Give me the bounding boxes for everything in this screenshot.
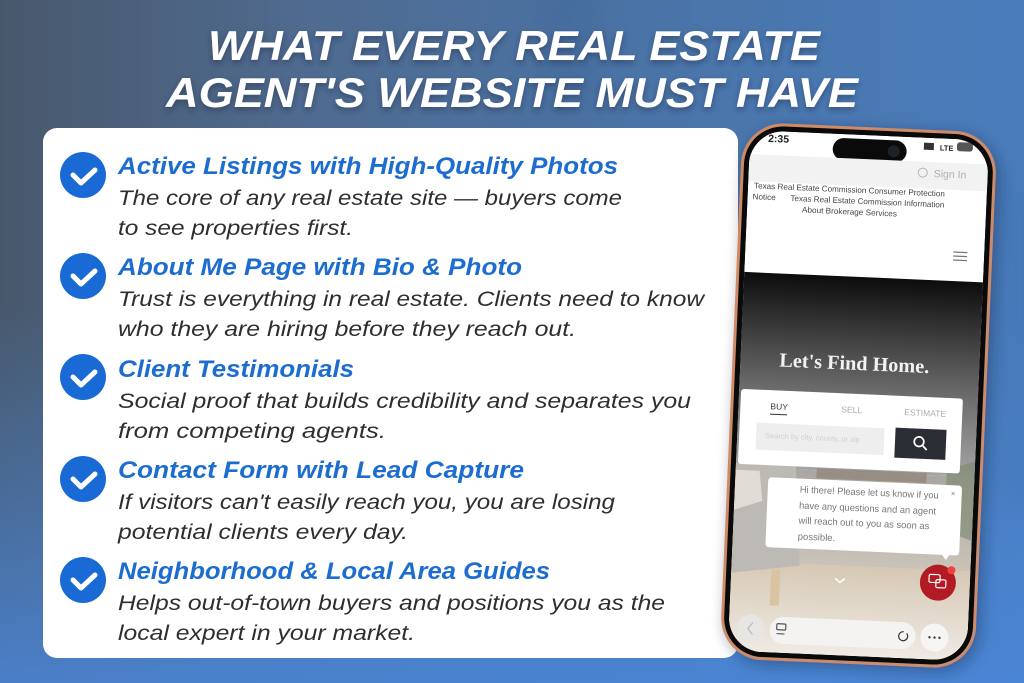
notice links: About Brokerage Services: [802, 205, 897, 219]
chat bubble: have any questions and an agent: [799, 501, 937, 518]
item: active listings: The core of any real estate site — buyers come: [118, 187, 622, 210]
item: neighborhood guides: local expert in your market.: [118, 622, 415, 645]
notice links: Notice: [752, 192, 776, 202]
item: contact form: [60, 456, 615, 544]
chat bubble: ×: [951, 489, 956, 498]
item: active listings: to see properties first.: [118, 217, 353, 240]
icon: chat button: [919, 564, 957, 601]
item: testimonials: Social proof that builds credibility and separates you: [118, 390, 691, 413]
item: about me: [60, 253, 706, 341]
item: active listings: [60, 152, 622, 240]
item: contact form: potential clients every day.: [117, 521, 408, 544]
item: contact form: Contact Form with Lead Capture: [118, 457, 524, 484]
item: neighborhood guides: [60, 557, 665, 645]
item: contact form: If visitors can't easily reach you, you are losing: [118, 491, 615, 514]
search card: BUY: [770, 401, 788, 412]
chat bubble: [765, 477, 962, 561]
item: active listings: Active Listings with High-Quality Photos: [117, 153, 618, 180]
hero heading: Let's Find Home.: [779, 350, 930, 378]
sign-in bar: [748, 154, 988, 191]
item: about me: About Me Page with Bio & Photo: [117, 254, 522, 281]
title: [165, 22, 860, 116]
hero image: [728, 272, 983, 661]
icon: chevron down: [835, 578, 845, 583]
search card: Search by city, county, or zip: [765, 431, 860, 444]
chat bubble: Hi there! Please let us know if you: [800, 485, 939, 502]
notice links: Texas Real Estate Commission Information: [790, 194, 945, 210]
item: testimonials: Client Testimonials: [118, 356, 354, 383]
icon: menu: [953, 252, 967, 261]
item: testimonials: [60, 354, 691, 443]
chat bubble: will reach out to you as soon as: [797, 515, 930, 532]
item: about me: Trust is everything in real estate. Clients need to know: [118, 288, 706, 311]
search card: [738, 389, 963, 474]
title: WHAT EVERY REAL ESTATE: [208, 22, 822, 69]
title: AGENT'S WEBSITE MUST HAVE: [165, 69, 860, 116]
browser bar: [736, 614, 949, 652]
phone screen: [728, 130, 989, 661]
item: neighborhood guides: Neighborhood & Local Area Guides: [118, 558, 550, 585]
chat bubble: possible.: [798, 532, 835, 544]
search card: SELL: [841, 404, 863, 415]
notice links: [753, 182, 944, 216]
panel: checklist card: [43, 128, 738, 658]
status bar: [768, 134, 973, 161]
item: neighborhood guides: Helps out-of-town buyers and positions you as the: [118, 592, 665, 615]
sign-in bar: Sign In: [933, 168, 967, 182]
search card: ESTIMATE: [904, 407, 947, 419]
status bar: 2:35: [768, 133, 790, 146]
item: testimonials: from competing agents.: [118, 420, 386, 443]
phone body: [719, 122, 998, 669]
phone mockup: [719, 122, 998, 669]
status bar: LTE: [940, 143, 954, 153]
notice links: Texas Real Estate Commission Consumer Protection: [754, 181, 945, 199]
item: about me: who they are hiring before they reach out.: [118, 318, 576, 341]
